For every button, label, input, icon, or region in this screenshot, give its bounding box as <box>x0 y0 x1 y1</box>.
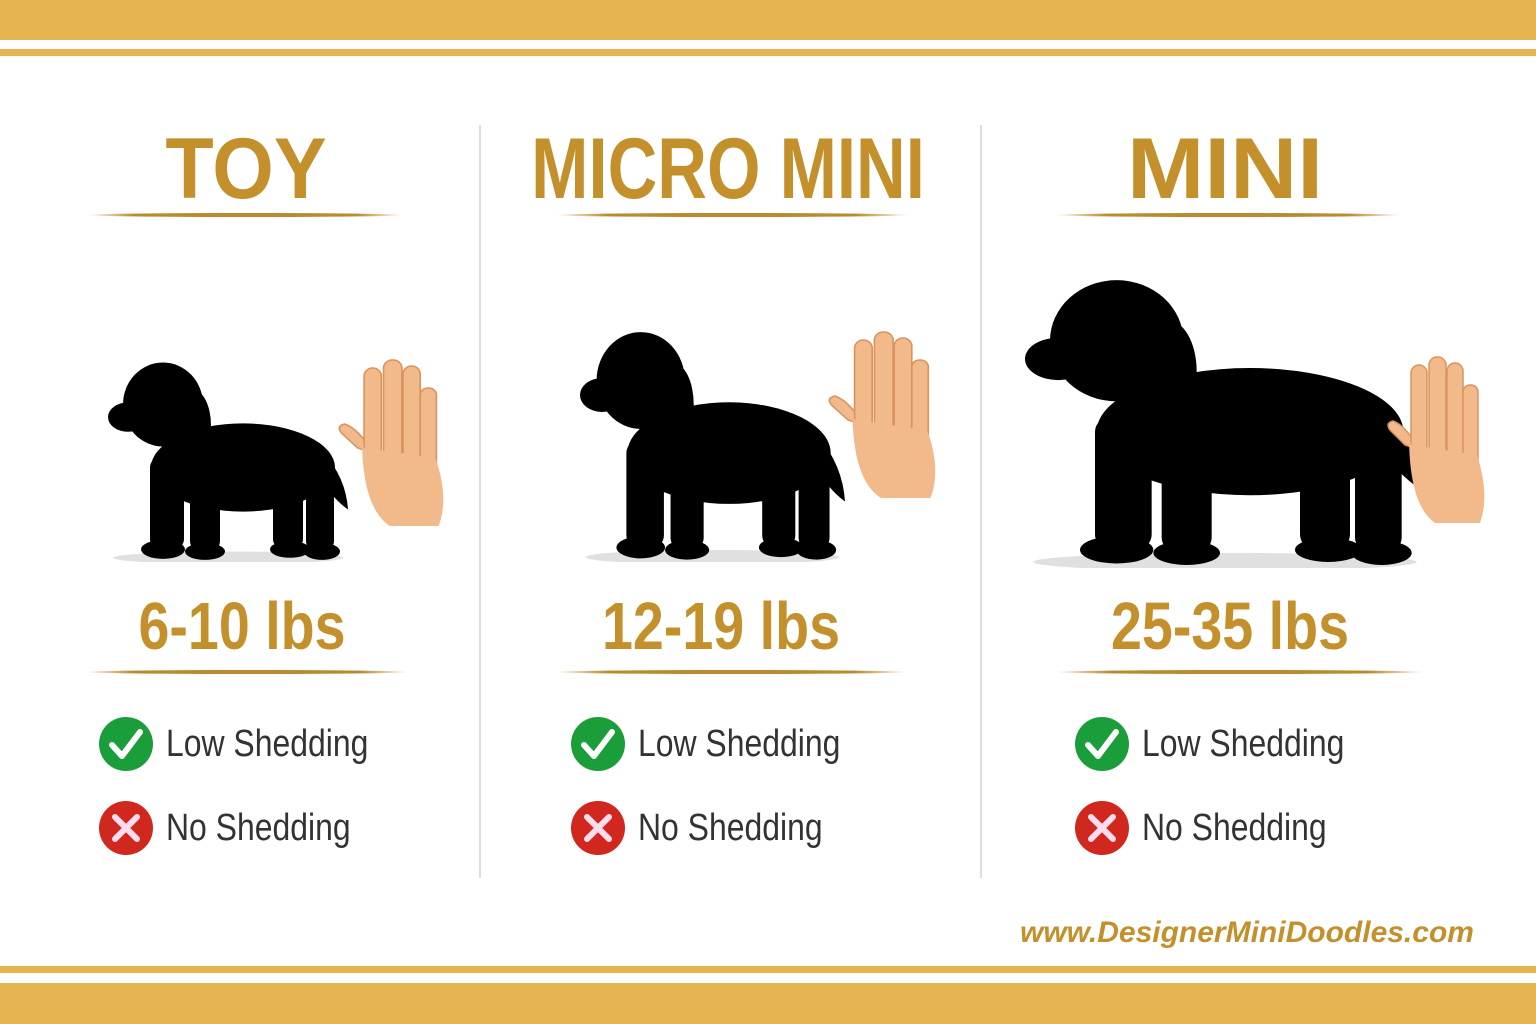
item: low shedding <box>1075 717 1344 771</box>
illustration: toy dog and hand <box>108 359 444 562</box>
item: low shedding: Low Shedding <box>638 723 840 765</box>
title: toy: TOY <box>165 121 327 217</box>
weight: micro mini: 12-19 lbs <box>602 589 840 664</box>
illustration: micro mini dog and hand <box>580 331 936 562</box>
item: low shedding: Low Shedding <box>166 723 368 765</box>
title: mini: MINI <box>1127 121 1323 217</box>
item: no shedding <box>99 801 351 855</box>
item: low shedding <box>99 717 368 771</box>
weight: toy: 6-10 lbs <box>138 589 346 664</box>
item: no shedding: No Shedding <box>166 807 351 849</box>
top band <box>0 0 1536 40</box>
item: no shedding: No Shedding <box>1142 807 1327 849</box>
item: no shedding <box>571 801 823 855</box>
weight: mini: 25-35 lbs <box>1111 589 1349 664</box>
column: micro mini <box>531 121 936 855</box>
title: micro mini: MICRO MINI <box>531 121 925 217</box>
item: no shedding: No Shedding <box>638 807 823 849</box>
column: toy <box>88 121 444 855</box>
illustration: mini dog and hand <box>1025 280 1484 568</box>
bottom band <box>0 966 1536 973</box>
item: low shedding <box>571 717 840 771</box>
item: no shedding <box>1075 801 1327 855</box>
website url: www.DesignerMiniDoodles.com <box>1020 916 1474 949</box>
item: low shedding: Low Shedding <box>1142 723 1344 765</box>
column: mini <box>1025 121 1484 855</box>
